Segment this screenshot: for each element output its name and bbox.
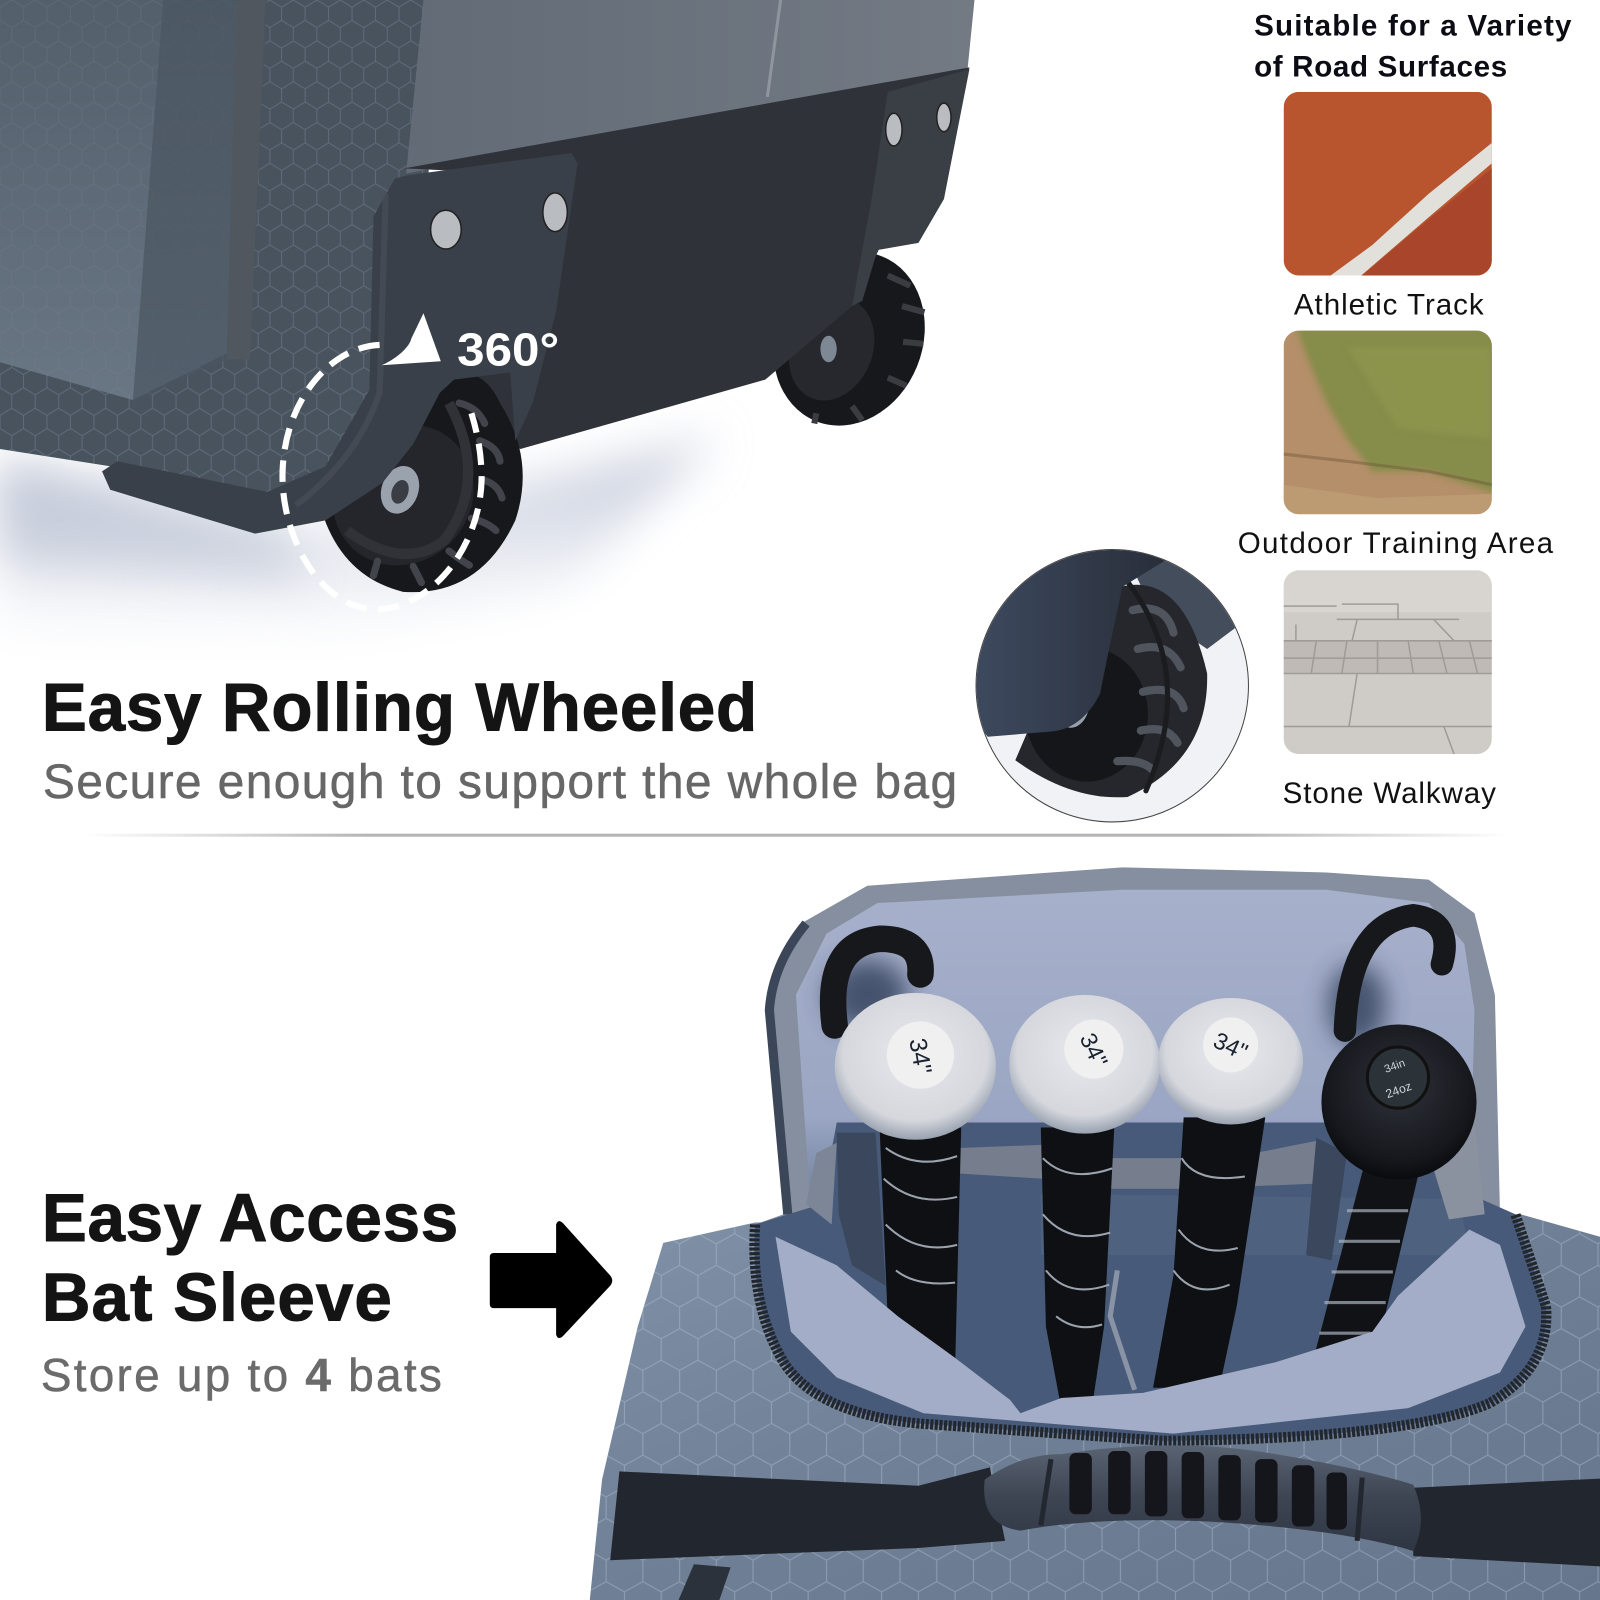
rivets <box>431 103 951 249</box>
heading: road surfaces: Suitable for a Variety <box>1254 10 1572 43</box>
heading: Easy Rolling Wheeled: Easy Rolling Wheeled <box>42 671 757 746</box>
right corner bracket <box>852 69 969 306</box>
opened lid <box>755 867 1520 1224</box>
hex fabric main body <box>0 0 434 505</box>
photo: open bag with bat sleeve <box>590 867 1600 1600</box>
floor shadow under the rolling bag <box>0 439 714 643</box>
dashed 360 rotation ring <box>282 313 482 609</box>
carry handle <box>984 1445 1421 1551</box>
opening interior <box>754 1122 1546 1441</box>
left wheel <box>303 372 523 594</box>
photo: athletic track <box>1284 92 1492 276</box>
inset: wheel close-up circle <box>969 546 1255 827</box>
inset circle outline <box>976 549 1248 822</box>
label: athletic track: Athletic Track <box>1294 288 1484 321</box>
side zipper bottom <box>679 1564 731 1600</box>
left corner bracket with bumper <box>102 153 578 534</box>
bat one: 34" <box>903 1036 936 1076</box>
bat one <box>835 993 996 1367</box>
subheading: store up to 4 bats: Store up to 4 bats <box>41 1349 442 1401</box>
heading: easy access bat sleeve <box>42 1181 458 1335</box>
lid shadows <box>827 959 1386 1046</box>
carry strap <box>610 1467 1600 1566</box>
bat four <box>1311 1024 1477 1367</box>
black leather panel <box>404 67 969 449</box>
photo: stone walkway <box>1284 570 1492 754</box>
bag front body <box>590 1214 1600 1600</box>
upper fabric panel <box>406 0 974 173</box>
bat four: 24oz <box>1384 1079 1413 1101</box>
label: 360 degrees: 360° <box>457 323 559 375</box>
heading: easy access bat sleeve: Easy Access <box>42 1181 458 1256</box>
heading: easy access bat sleeve: Bat Sleeve <box>42 1260 392 1335</box>
lining drape and pull tab <box>776 1230 1526 1434</box>
bat two <box>1009 995 1160 1408</box>
inset bracket <box>976 550 1165 737</box>
bat four: 34in <box>1383 1057 1407 1076</box>
heading: road surfaces <box>1254 10 1572 84</box>
subheading: secure enough: Secure enough to support the whole bag <box>43 756 957 809</box>
label: stone walkway: Stone Walkway <box>1283 777 1496 810</box>
bat three <box>1153 998 1303 1388</box>
bat two: 34" <box>1075 1029 1113 1071</box>
arrowhead <box>382 313 441 365</box>
right wheel <box>748 229 950 449</box>
divider <box>82 834 1510 837</box>
photo: rolling bag bottom with wheels <box>0 0 974 609</box>
pocket pleats and webbing <box>806 1122 1485 1286</box>
zipper <box>754 1214 1546 1441</box>
heading: road surfaces: of Road Surfaces <box>1254 51 1507 84</box>
inset tire <box>1015 582 1207 797</box>
front pocket <box>0 0 267 403</box>
bat three: 34" <box>1209 1027 1252 1065</box>
bag hooks <box>833 915 1445 1031</box>
inset background bracket <box>1124 550 1235 649</box>
arrow pointing to bat sleeve <box>490 1221 612 1338</box>
photo: outdoor training area <box>1284 327 1500 514</box>
label: outdoor training area: Outdoor Training Area <box>1238 527 1554 560</box>
